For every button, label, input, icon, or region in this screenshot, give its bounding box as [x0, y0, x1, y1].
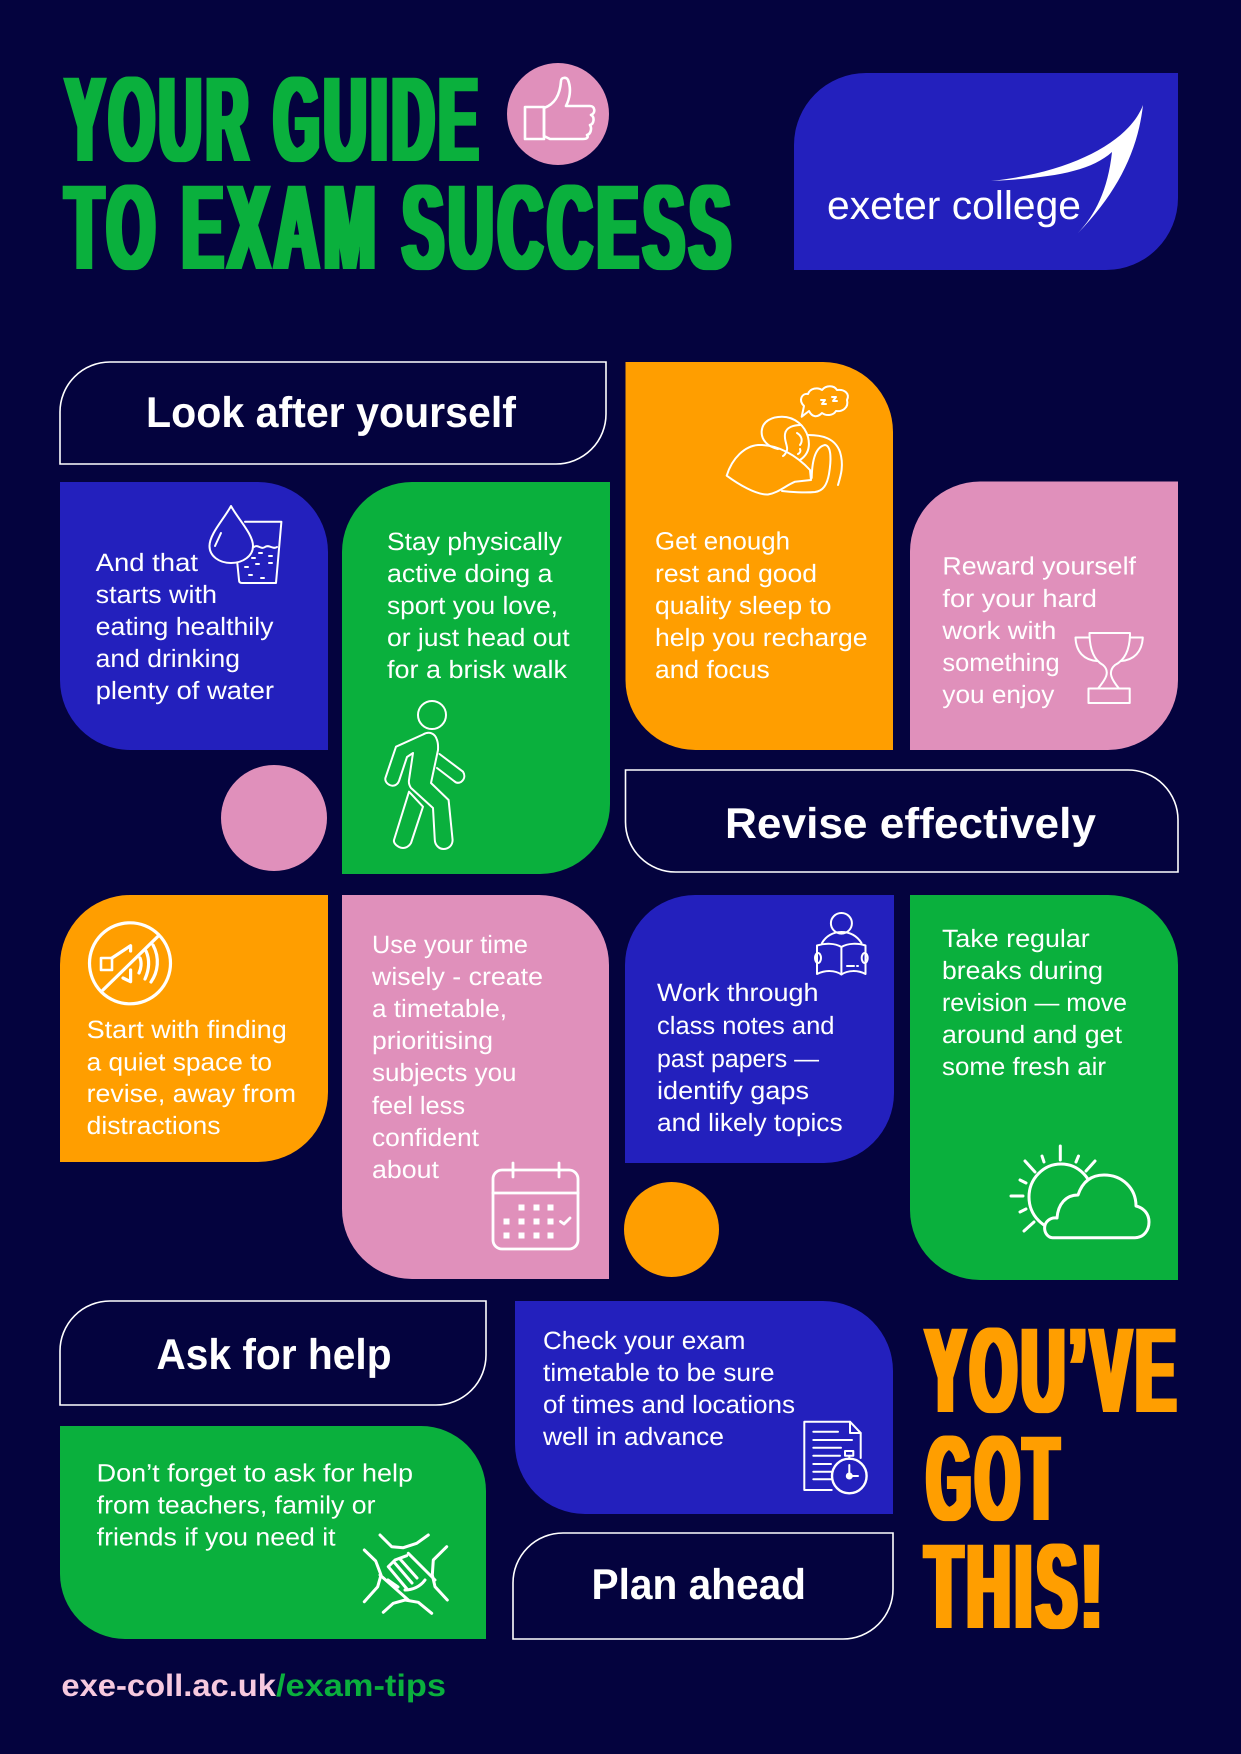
slogan: you've got this: GOT	[927, 1410, 1063, 1546]
icon: calendar	[493, 1163, 578, 1249]
panel: regular breaks: revision — move	[942, 989, 1127, 1017]
panel: ask for help	[60, 1426, 486, 1639]
heading: revise effectively	[626, 770, 1178, 872]
panel: water: starts with	[96, 581, 217, 609]
panel: sleep: and focus	[655, 656, 770, 684]
panel: physical activity	[342, 482, 610, 874]
heading: plan ahead: Plan ahead	[592, 1561, 806, 1609]
panel: reward	[910, 482, 1178, 750]
panel: use your time: about	[372, 1156, 439, 1184]
panel: use your time: a timetable,	[372, 995, 507, 1023]
panel: use your time: prioritising	[372, 1027, 493, 1055]
panel: class notes: past papers —	[657, 1045, 819, 1073]
icon: muted speaker	[90, 923, 170, 1004]
panel: regular breaks: around and get	[942, 1021, 1122, 1049]
panel: check timetable: timetable to be sure	[543, 1359, 774, 1387]
website url	[61, 1668, 446, 1703]
panel: reward: you enjoy	[942, 681, 1055, 709]
panel: regular breaks	[910, 895, 1178, 1280]
panel: ask for help: friends if you need it	[97, 1524, 336, 1552]
icon: sleeping person	[727, 386, 848, 495]
panel: regular breaks: breaks during	[942, 957, 1103, 985]
heading: ask for help	[60, 1301, 486, 1405]
panel: class notes: class notes and	[657, 1012, 834, 1040]
panel: use your time	[342, 895, 609, 1279]
heading: ask for help: Ask for help	[156, 1331, 392, 1379]
website url: exe-coll.ac.uk	[61, 1668, 277, 1703]
heading: plan ahead	[513, 1533, 893, 1639]
panel: water: and drinking	[96, 645, 240, 673]
panel: regular breaks: some fresh air	[942, 1053, 1106, 1081]
panel: physical activity: Stay physically	[387, 528, 563, 556]
panel: sleep: help you recharge	[655, 624, 868, 652]
panel: reward: Reward yourself	[942, 552, 1136, 580]
panel: class notes	[625, 895, 894, 1163]
heading: look after yourself	[60, 362, 606, 464]
panel: physical activity: for a brisk walk	[387, 656, 568, 684]
slogan: you've got this	[926, 1302, 1180, 1654]
panel: quiet space: Start with finding	[87, 1016, 287, 1044]
panel: class notes: Work through	[657, 979, 818, 1007]
panel: regular breaks: Take regular	[942, 925, 1090, 953]
panel: use your time: Use your time	[372, 931, 528, 959]
panel: quiet space: distractions	[87, 1112, 220, 1140]
logo swoosh	[991, 105, 1143, 233]
panel: class notes: and likely topics	[657, 1109, 843, 1137]
panel: sleep	[626, 362, 893, 750]
panel: water	[60, 482, 328, 750]
panel: physical activity: or just head out	[387, 624, 570, 652]
panel: use your time: confident	[372, 1124, 479, 1152]
icon: thumbs up	[507, 63, 609, 165]
panel: sleep: Get enough	[655, 528, 790, 556]
title: YOUR GUIDE	[66, 51, 482, 187]
panel: sleep: quality sleep to	[655, 592, 832, 620]
website url: /exam-tips	[276, 1668, 446, 1703]
logo panel	[794, 73, 1178, 270]
panel: use your time: feel less	[372, 1092, 465, 1120]
panel: quiet space	[60, 895, 328, 1162]
icon: walking person	[385, 701, 464, 849]
panel: ask for help: from teachers, family or	[97, 1492, 375, 1520]
panel: reward: work with	[941, 617, 1056, 645]
panel: check timetable	[515, 1301, 893, 1514]
panel: check timetable: of times and locations	[543, 1391, 795, 1419]
icon: trophy	[1076, 633, 1143, 703]
panel: physical activity: sport you love,	[387, 592, 558, 620]
panel: quiet space: revise, away from	[87, 1080, 296, 1108]
heading: look after yourself: Look after yourself	[146, 389, 517, 437]
icon: person reading	[815, 913, 868, 974]
panel: use your time: subjects you	[372, 1059, 516, 1087]
title	[66, 51, 735, 295]
logo panel: exeter college	[827, 184, 1081, 228]
panel: use your time: wisely - create	[371, 963, 543, 991]
icon: sun and cloud	[1011, 1146, 1149, 1238]
heading: revise effectively: Revise effectively	[725, 800, 1096, 848]
panel: check timetable: Check your exam	[543, 1327, 745, 1355]
panel: water: eating healthily	[96, 613, 274, 641]
decorative circle: pink	[221, 765, 327, 871]
icon: water drop and glass	[210, 506, 281, 583]
panel: water: And that	[96, 549, 198, 577]
decorative circle: orange	[624, 1182, 719, 1277]
panel: quiet space: a quiet space to	[87, 1048, 272, 1076]
icon: joined hands	[364, 1535, 447, 1613]
panel: reward: something	[942, 649, 1060, 677]
panel: sleep: rest and good	[655, 560, 817, 588]
panel: check timetable: well in advance	[542, 1423, 724, 1451]
panel: physical activity: active doing a	[387, 560, 553, 588]
panel: class notes: identify gaps	[657, 1077, 809, 1105]
panel: water: plenty of water	[96, 677, 274, 705]
icon: document and timer	[804, 1422, 867, 1493]
panel: ask for help: Don’t forget to ask for help	[97, 1460, 413, 1488]
panel: reward: for your hard	[942, 585, 1097, 613]
